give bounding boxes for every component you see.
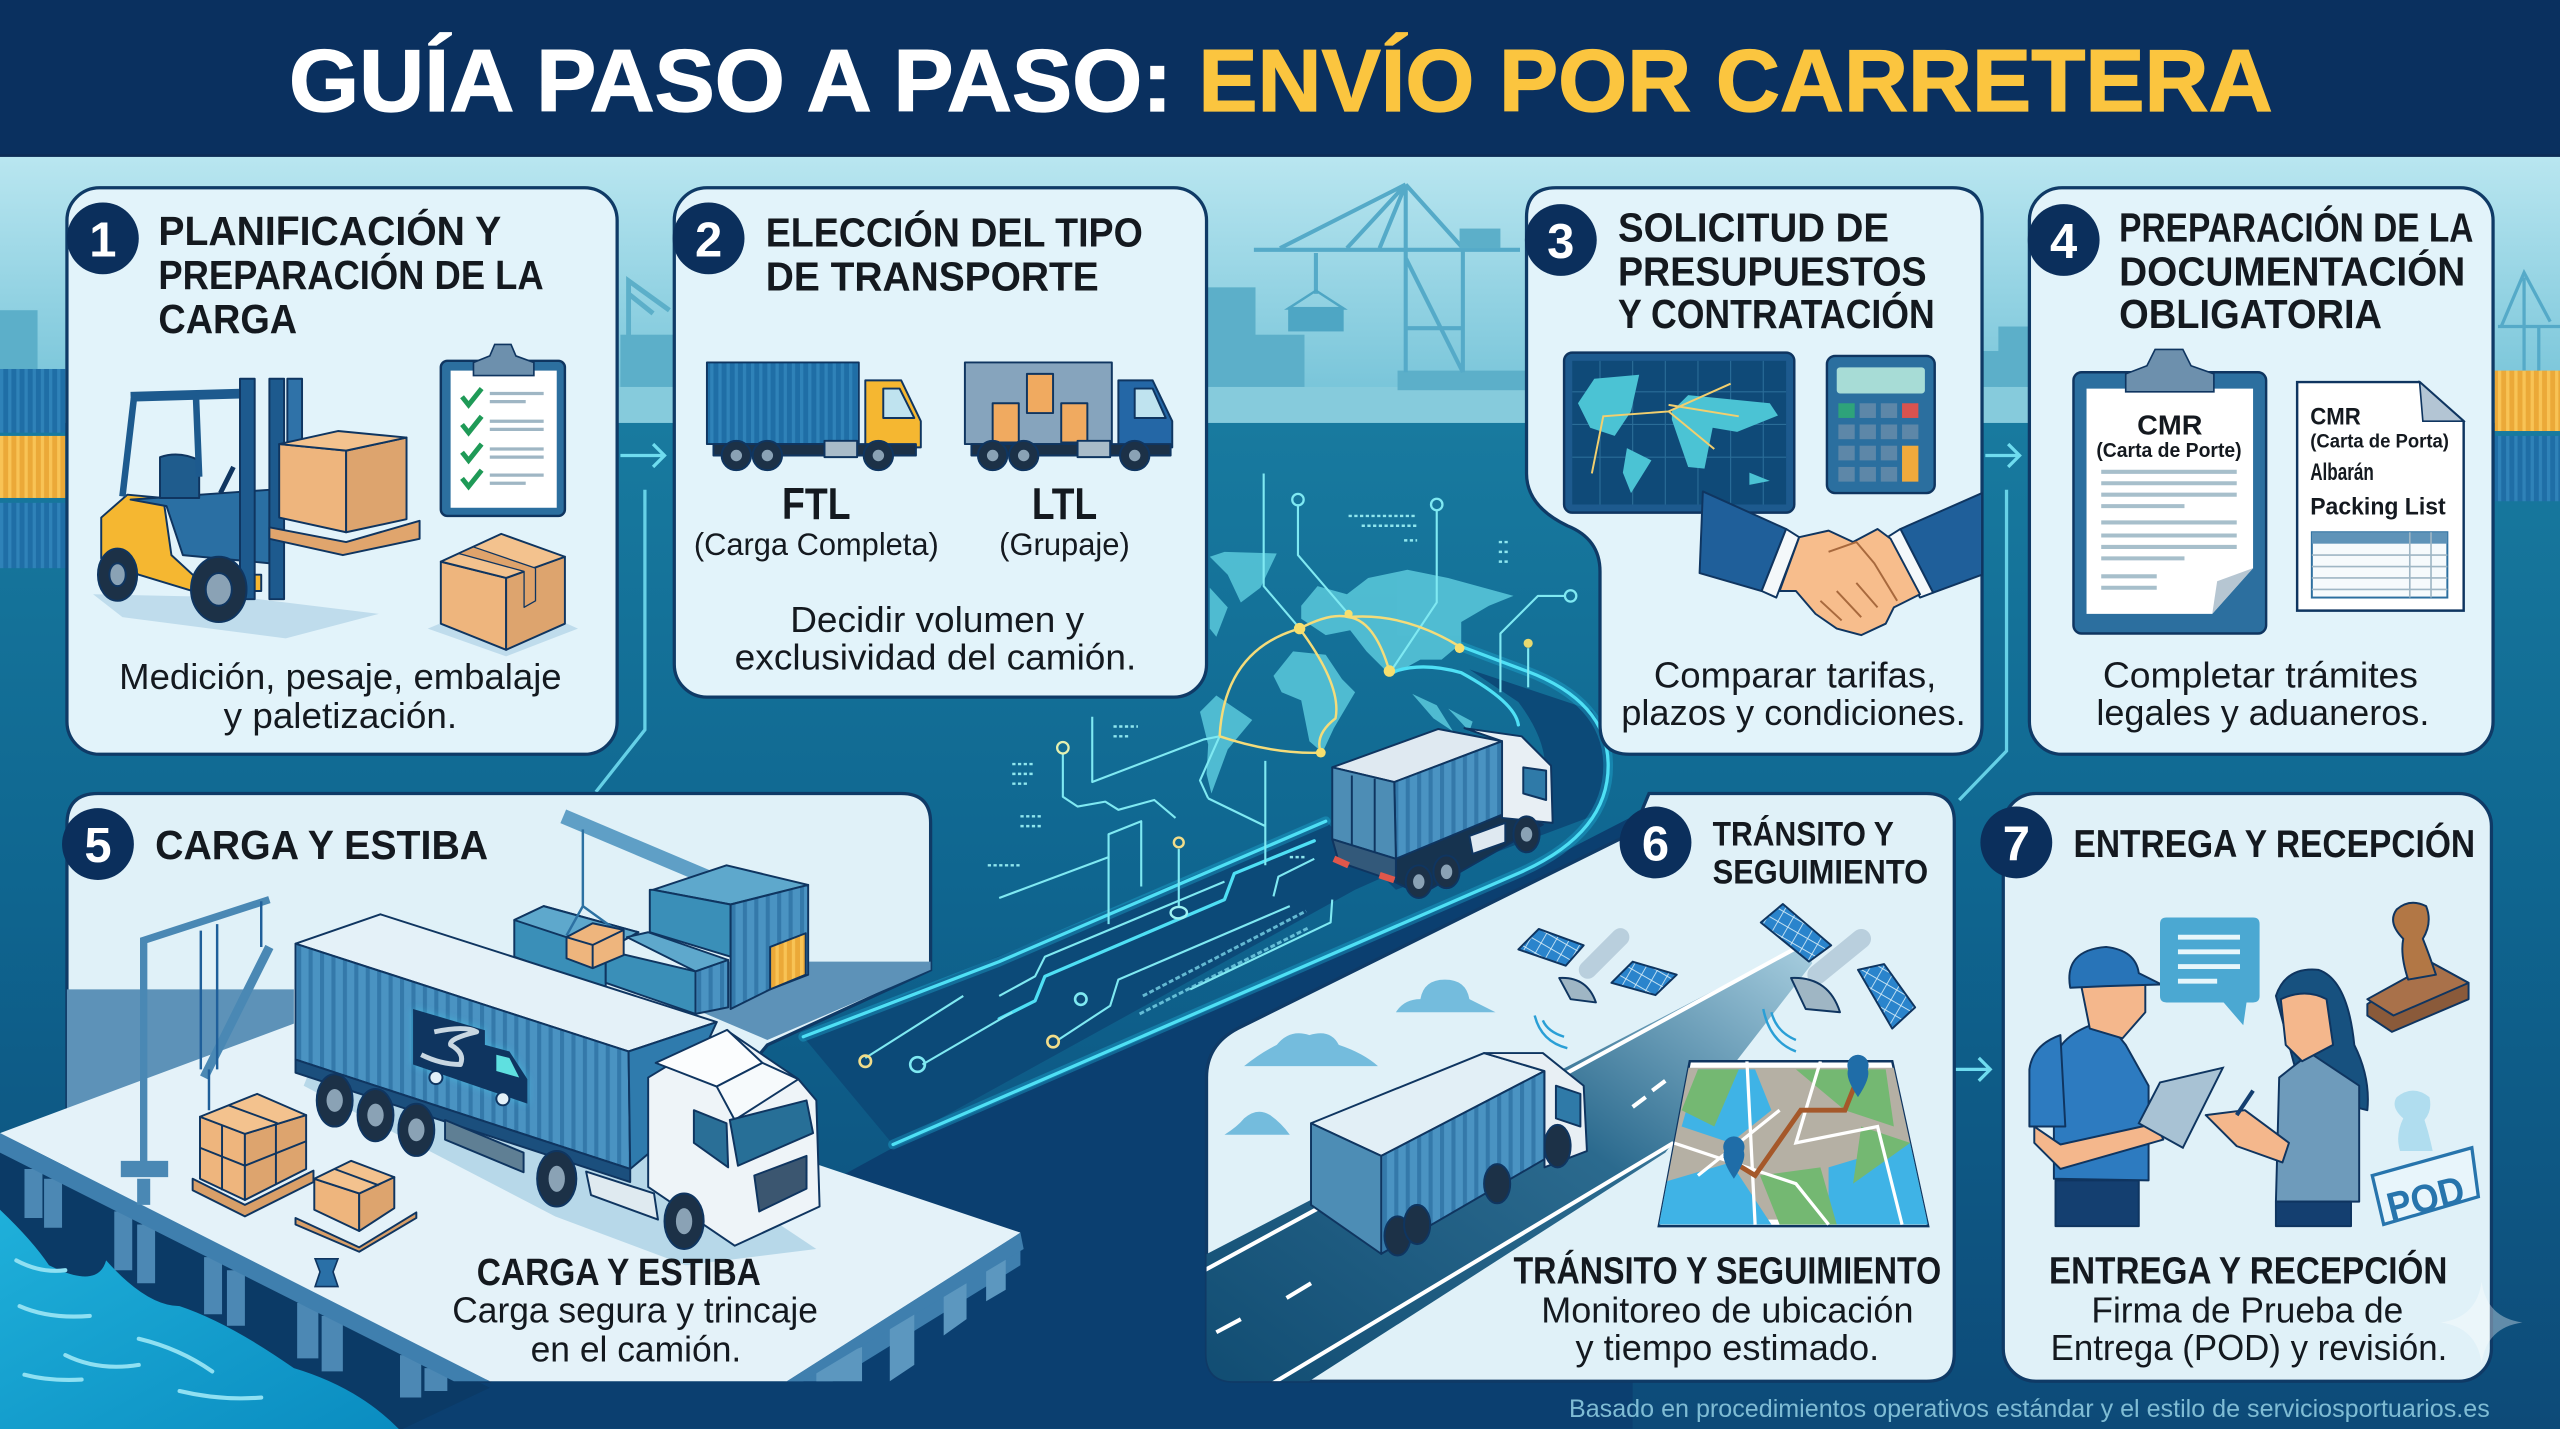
description step 1 xyxy=(119,656,562,736)
description step 6 xyxy=(1513,1249,1941,1368)
panel: step 2 transport choice xyxy=(673,188,1207,697)
title bar: ENVÍO POR CARRETERA xyxy=(1198,31,2273,130)
dock deck xyxy=(0,980,1024,1381)
world map xyxy=(1200,552,1513,793)
heading step 6: SEGUIMIENTO xyxy=(1713,853,1928,891)
heading step 2: ELECCIÓN DEL TIPO xyxy=(766,210,1143,256)
heading step 7: ENTREGA Y RECEPCIÓN xyxy=(2073,822,2475,866)
step number 5 xyxy=(62,808,134,880)
step number 7: 7 xyxy=(2003,817,2030,871)
icon: calculator xyxy=(1827,356,1935,493)
panel: step 1 planning xyxy=(67,188,617,754)
icon: document list xyxy=(2297,382,2464,611)
description step 5: Carga segura y trincaje xyxy=(452,1289,818,1330)
heading step 2 xyxy=(766,210,1143,300)
description step 7 xyxy=(2049,1249,2447,1368)
heading step 6: TRÁNSITO Y xyxy=(1713,814,1894,854)
description step 6: TRÁNSITO Y SEGUIMIENTO xyxy=(1513,1249,1941,1291)
icon: world map monitor xyxy=(1564,353,1794,513)
description step 3: plazos y condiciones. xyxy=(1621,692,1966,733)
icon: satellite right xyxy=(1761,904,1915,1051)
step number 6 xyxy=(1620,807,1691,878)
heading step 1 xyxy=(158,208,544,342)
description step 6: Monitoreo de ubicación xyxy=(1541,1289,1913,1330)
label LTL xyxy=(999,480,1130,562)
description step 1: Medición, pesaje, embalaje xyxy=(119,656,562,697)
arrow: step 1 to step 2 with feed line xyxy=(596,444,664,792)
step number 1: 1 xyxy=(89,213,116,267)
arrow: step 3 to step 4 with feed line xyxy=(1959,444,2020,800)
title bar: GUÍA PASO A PASO: xyxy=(289,31,1172,130)
step number 3: 3 xyxy=(1547,215,1574,269)
digital network lines xyxy=(803,473,1608,1144)
icon: sparkle watermark xyxy=(2441,1282,2522,1363)
description step 3: Comparar tarifas, xyxy=(1654,654,1936,695)
arrow: step 6 to step 7 xyxy=(1956,1058,1990,1081)
icon: delivery man xyxy=(2029,947,2163,1226)
icon: palletised boxes xyxy=(193,1094,416,1252)
heading step 2: DE TRANSPORTE xyxy=(766,254,1099,300)
heading step 4: DOCUMENTACIÓN xyxy=(2119,249,2465,295)
icon: POD stamp xyxy=(2372,1091,2478,1229)
label FTL: FTL xyxy=(782,480,851,529)
description step 3 xyxy=(1621,654,1966,733)
heading step 5: CARGA Y ESTIBA xyxy=(155,822,488,868)
icon: rubber stamp xyxy=(2367,903,2469,1032)
description step 7: Entrega (POD) y revisión. xyxy=(2051,1327,2447,1368)
panel: step 3 quotes xyxy=(1525,188,1982,754)
step number 6: 6 xyxy=(1642,817,1669,871)
icons: clouds xyxy=(1224,980,1496,1135)
description step 1: y paletización. xyxy=(224,695,457,736)
label FTL xyxy=(694,480,939,562)
description step 7: ENTREGA Y RECEPCIÓN xyxy=(2049,1249,2447,1291)
icon: document list: CMR xyxy=(2310,403,2361,430)
icon: checklist clipboard xyxy=(441,344,565,516)
icon: speech bubble xyxy=(2160,918,2260,1025)
panel: step 7 delivery xyxy=(1980,793,2522,1381)
description step 4 xyxy=(2096,654,2429,733)
icon: FTL truck xyxy=(707,362,921,470)
description step 5 xyxy=(452,1251,818,1370)
description step 4: legales y aduaneros. xyxy=(2096,692,2429,733)
panel backdrop xyxy=(67,793,931,1381)
truck logo on trailer xyxy=(413,1009,527,1105)
description step 2: Decidir volumen y xyxy=(790,599,1084,640)
label LTL: LTL xyxy=(1032,480,1097,529)
heading step 4: PREPARACIÓN DE LA xyxy=(2119,205,2473,251)
icon: POD stamp: POD xyxy=(2383,1169,2469,1229)
icon: satellite left xyxy=(1518,929,1677,1048)
glowing road surface xyxy=(803,669,1609,1144)
panel: step 6 transit and tracking xyxy=(1176,793,1954,1404)
heading step 3 xyxy=(1618,205,1935,337)
central truck on glowing road xyxy=(1332,728,1553,898)
icon: CMR clipboard: CMR xyxy=(2137,409,2202,440)
icon: bollard xyxy=(315,1259,338,1287)
icon: document list: Albarán xyxy=(2310,459,2374,486)
dock understructure xyxy=(0,1143,1020,1429)
background: stacked containers left xyxy=(0,369,65,568)
step number 7 xyxy=(1980,807,2052,878)
step number 2 xyxy=(673,202,744,274)
background: stacked containers right xyxy=(2495,371,2560,501)
icon: dockside crane xyxy=(121,900,269,1205)
heading step 1: PREPARACIÓN DE LA xyxy=(158,252,544,298)
heading step 1: CARGA xyxy=(158,296,297,342)
icon: forklift with box xyxy=(93,379,420,638)
heading step 6 xyxy=(1713,814,1928,891)
icon: LTL truck xyxy=(965,362,1172,470)
icon: cardboard box xyxy=(428,534,578,656)
heading step 4: OBLIGATORIA xyxy=(2119,291,2382,337)
step number 5: 5 xyxy=(84,819,112,873)
description step 6: y tiempo estimado. xyxy=(1576,1327,1879,1368)
description step 4: Completar trámites xyxy=(2103,654,2418,695)
panel: step 5 loading at the dock xyxy=(0,793,1024,1429)
description step 5: CARGA Y ESTIBA xyxy=(477,1251,761,1293)
step number 4 xyxy=(2028,204,2100,276)
description step 5: en el camión. xyxy=(531,1329,741,1370)
background: port skyline and cranes xyxy=(0,184,2560,423)
label LTL: (Grupaje) xyxy=(999,527,1130,562)
lower navy ground xyxy=(400,816,1633,1429)
heading step 3: PRESUPUESTOS xyxy=(1618,249,1927,295)
heading step 4 xyxy=(2119,205,2473,337)
icon: CMR clipboard: (Carta de Porte) xyxy=(2096,440,2242,462)
icon: articulated lorry xyxy=(296,914,820,1265)
panel: step 4 documentation xyxy=(2028,188,2493,754)
water with waves xyxy=(0,1210,400,1429)
step number 1 xyxy=(67,202,139,274)
title bar xyxy=(0,0,2560,157)
description step 2: exclusividad del camión. xyxy=(735,636,1136,677)
step number 2: 2 xyxy=(695,213,722,267)
footer credit: Basado en procedimientos operativos estándar y el estilo de serviciosportuarios.es xyxy=(1569,1395,2490,1423)
icon: CMR clipboard xyxy=(2073,349,2266,633)
description step 2 xyxy=(735,599,1136,677)
icon: document list: Packing List xyxy=(2310,493,2446,520)
heading step 3: SOLICITUD DE xyxy=(1618,205,1889,251)
step number 3 xyxy=(1525,204,1597,276)
heading step 1: PLANIFICACIÓN Y xyxy=(158,208,501,254)
icon: tablet xyxy=(2139,1068,2223,1148)
icon: handshake xyxy=(1700,491,1982,635)
icon: lorry on highway xyxy=(1311,1053,1587,1256)
highway xyxy=(1206,948,1812,1382)
step number 4: 4 xyxy=(2050,215,2077,269)
label FTL: (Carga Completa) xyxy=(694,527,939,562)
heading step 3: Y CONTRATACIÓN xyxy=(1618,291,1935,337)
icon: stacked containers and hoist xyxy=(514,816,808,1014)
icon: document list: (Carta de Porta) xyxy=(2310,430,2449,452)
description step 7: Firma de Prueba de xyxy=(2091,1289,2403,1330)
icon: customer woman xyxy=(2206,969,2368,1226)
icon: route map xyxy=(1659,1055,1930,1226)
